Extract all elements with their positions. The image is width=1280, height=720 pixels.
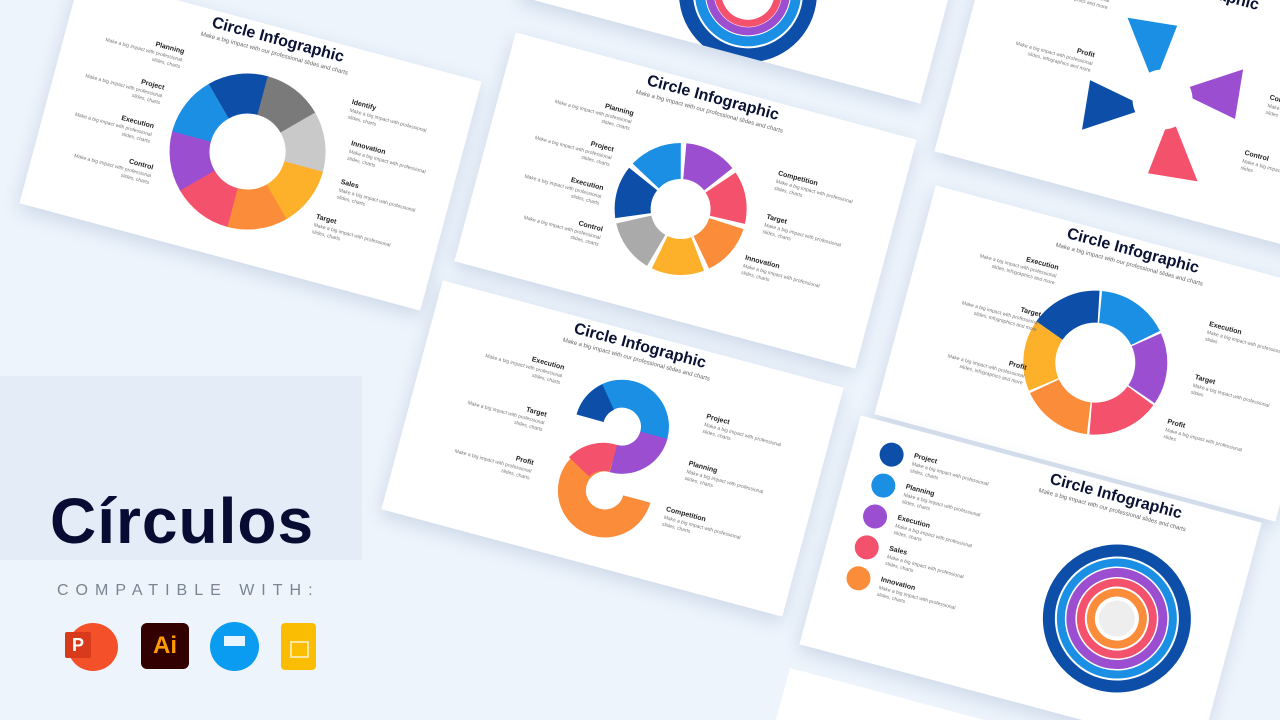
slide 4: arrow ring: Make a big impact with professional slides, infographics and more bbox=[947, 353, 1025, 386]
slide 3: S shape: Make a big impact with professional slides, charts bbox=[684, 469, 764, 495]
slide 2: heptagon segments: Make a big impact with professional slides, charts bbox=[740, 263, 820, 290]
slide 5: list + concentric rings: Make a big impact with professional slides, charts bbox=[884, 554, 964, 580]
slide 3: S shape: Make a big impact with professional slides, charts bbox=[454, 448, 532, 481]
slide 7: bow shapes: Control bbox=[1244, 150, 1269, 163]
slide 6: top partial concentric bbox=[519, 0, 982, 104]
slide 1: donut: Make a big impact with professional slides, charts bbox=[85, 73, 163, 106]
slide 3: S shape: Make a big impact with professional slides, charts bbox=[467, 400, 545, 433]
slide 3: S shape: Target bbox=[525, 406, 547, 419]
slide 5: list + concentric rings: Make a big impact with professional slides, charts bbox=[893, 523, 973, 549]
slide 5: list + concentric rings: Make a big impact with professional slides, charts bbox=[909, 461, 989, 488]
slide 1: donut bbox=[19, 0, 482, 311]
slide 1: donut: Sales bbox=[340, 179, 359, 190]
slide 4: arrow ring bbox=[874, 185, 1280, 522]
slide 2: heptagon segments: Make a big impact with professional slides, charts bbox=[534, 135, 612, 168]
slide 7: bow shapes: Profit bbox=[1076, 48, 1095, 59]
icons: software: P bbox=[72, 635, 84, 655]
slide 5: list + concentric rings: Make a big impact with our professional slides and charts bbox=[1038, 488, 1186, 533]
slide 1: donut: Project bbox=[140, 79, 165, 92]
slide 4: arrow ring: Circle Infographic bbox=[1065, 225, 1201, 277]
slide 1: donut: Make a big impact with professional slides, charts bbox=[74, 112, 152, 145]
slide 1: donut: Identify bbox=[351, 99, 377, 112]
slide 3: S shape: Competition bbox=[665, 506, 706, 523]
slide 3: S shape: Execution bbox=[531, 356, 565, 372]
slide 3: S shape: Planning bbox=[688, 460, 718, 475]
slide 1: donut: Planning bbox=[155, 41, 185, 56]
slide 2: heptagon segments bbox=[454, 32, 917, 369]
slide 2: heptagon segments: Make a big impact with our professional slides and charts bbox=[635, 90, 783, 135]
slide 2: heptagon segments: Make a big impact with professional slides, charts bbox=[523, 215, 601, 248]
slide 2: heptagon segments: Execution bbox=[570, 177, 604, 192]
slide 2: heptagon segments: Make a big impact with professional slides, charts bbox=[554, 99, 632, 132]
slide 2: heptagon segments: Circle Infographic bbox=[645, 72, 781, 124]
slide 4: arrow ring: Target bbox=[1194, 374, 1216, 386]
slide 2: heptagon segments: Innovation bbox=[744, 255, 780, 270]
slide 4: arrow ring: Make a big impact with professional slides, infographics and more bbox=[961, 300, 1039, 333]
chart: four bow segments bbox=[1082, 18, 1244, 182]
slide 2: heptagon segments: Competition bbox=[777, 170, 818, 188]
slide 1: donut: Make a big impact with professional slides, charts bbox=[336, 188, 416, 214]
slide 1: donut: Make a big impact with our professional slides and charts bbox=[200, 32, 348, 77]
slide 3: S shape: Make a big impact with professional slides, charts bbox=[485, 353, 563, 386]
slide 5: list + concentric rings: Make a big impact with professional slides, charts bbox=[876, 585, 956, 611]
slide 4: arrow ring: Make a big impact with professional slides bbox=[1163, 427, 1243, 453]
slide 4: arrow ring: Execution bbox=[1208, 321, 1242, 336]
slide 1: donut: Make a big impact with professional slides, charts bbox=[347, 108, 427, 134]
slide 2: heptagon segments: Make a big impact with professional slides, charts bbox=[524, 174, 602, 207]
chart: 8-segment donut bbox=[170, 74, 326, 230]
slide 3: S shape: Make a big impact with our professional slides and charts bbox=[562, 338, 710, 383]
slide 1: donut: Make a big impact with professional slides, charts bbox=[105, 37, 183, 70]
slide 2: heptagon segments: Make a big impact with professional slides, charts bbox=[773, 179, 853, 205]
slide 1: donut: Make a big impact with professional slides, charts bbox=[311, 222, 391, 249]
slide 7: bow shapes: Make a big impact with professional slides, infographics and more bbox=[1015, 41, 1093, 74]
slide 2: heptagon segments: Make a big impact with professional slides, charts bbox=[762, 222, 842, 249]
slide 2: heptagon segments: Planning bbox=[604, 103, 634, 118]
slide 8: bottom partial corner bbox=[776, 668, 983, 720]
slide 3: S shape: Project bbox=[706, 413, 730, 426]
icons: software bbox=[65, 622, 316, 671]
slide 1: donut: Make a big impact with professional slides, charts bbox=[74, 153, 152, 186]
slide 5: list + concentric rings bbox=[799, 415, 1262, 720]
slide 4: arrow ring: Profit bbox=[1167, 418, 1186, 430]
slide 3: S shape: Profit bbox=[515, 455, 534, 467]
slide 1: donut: Make a big impact with professional slides, charts bbox=[346, 149, 426, 175]
slide 4: arrow ring: Execution bbox=[1025, 256, 1059, 272]
slide 5: list + concentric rings: Innovation bbox=[880, 576, 916, 592]
slide 1: donut: Control bbox=[128, 158, 154, 172]
icons: software: Ai bbox=[153, 632, 177, 659]
slide 5: list + concentric rings: Planning bbox=[905, 484, 935, 498]
slide 2: heptagon segments: Project bbox=[590, 141, 614, 154]
slide 4: arrow ring: Make a big impact with professional slides, infographics and more bbox=[979, 253, 1057, 286]
slide 5: list + concentric rings: Project bbox=[913, 453, 938, 466]
compatible with text: COMPATIBLE WITH: bbox=[57, 582, 320, 599]
slide 4: arrow ring: Profit bbox=[1008, 360, 1027, 372]
left title background panel bbox=[0, 376, 362, 560]
slide 1: donut: Innovation bbox=[350, 140, 386, 156]
slide 3: S shape: Make a big impact with professional slides, charts bbox=[661, 515, 741, 541]
slide 2: heptagon segments: Target bbox=[766, 214, 788, 226]
slide 4: arrow ring: Make a big impact with our professional slides and charts bbox=[1055, 243, 1203, 288]
slide 2: heptagon segments: Control bbox=[578, 220, 603, 233]
slide 5: list + concentric rings: Circle Infographic bbox=[1048, 471, 1184, 522]
slide 4: arrow ring: Make a big impact with professional slides bbox=[1190, 383, 1270, 409]
slide 1: donut: Target bbox=[315, 214, 337, 226]
title: Círculos: Círculos bbox=[50, 485, 314, 557]
slide 5: list + concentric rings: Make a big impact with professional slides, charts bbox=[901, 492, 981, 519]
slide 7: bow shapes bbox=[934, 0, 1280, 259]
slide 3: S shape: Circle Infographic bbox=[572, 320, 708, 372]
slide 3: S shape bbox=[381, 280, 844, 617]
slide 3: S shape: Make a big impact with professional slides, charts bbox=[702, 422, 782, 448]
slide 4: arrow ring: Target bbox=[1020, 307, 1042, 319]
slide 5: list + concentric rings: Execution bbox=[897, 514, 931, 530]
slide 1: donut: Execution bbox=[121, 115, 155, 130]
slide 5: list + concentric rings: Sales bbox=[888, 545, 908, 557]
slide 1: donut: Circle Infographic bbox=[210, 14, 346, 66]
